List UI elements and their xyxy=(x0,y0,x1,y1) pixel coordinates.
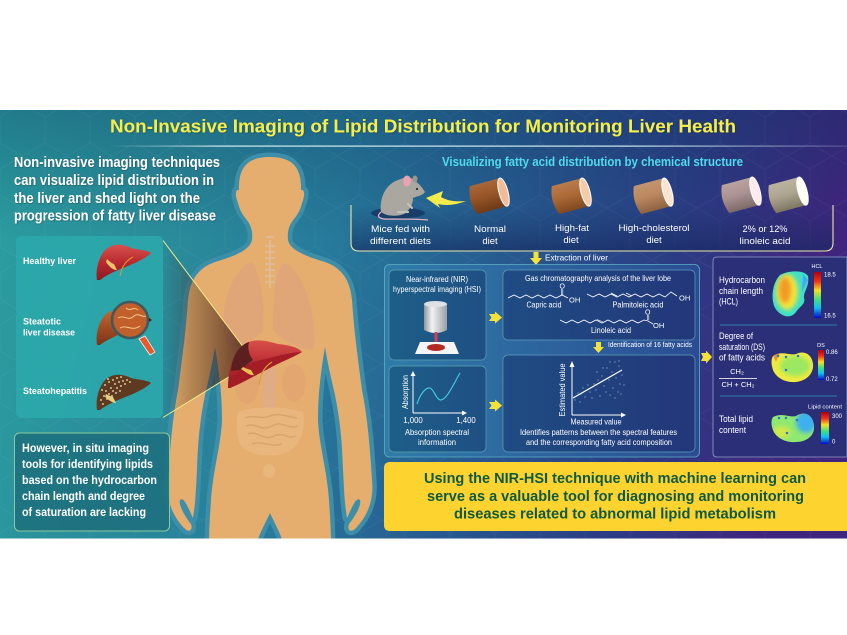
panel: absorption spectrum: Absorption spectral xyxy=(405,428,469,437)
diet labels: diet xyxy=(646,235,662,246)
icon: liver in body xyxy=(228,340,302,388)
arrow: NIR to gas chromatography xyxy=(489,312,502,324)
trachea xyxy=(265,237,275,288)
result: degree of saturation: saturation (DS) xyxy=(719,342,765,353)
arrow: extraction of liver xyxy=(530,252,542,265)
icon: high-cholesterol diet pellet xyxy=(631,177,676,215)
diet labels: High-cholesterol xyxy=(618,223,690,234)
absorption chart: 1,400 xyxy=(456,416,476,425)
intro text: can visualize lipid distribution in xyxy=(14,173,214,189)
diet labels: High-fat xyxy=(555,223,589,234)
callout: lacking tools: tools for identifying lipids xyxy=(22,457,153,471)
capric acid structure: OH xyxy=(569,296,580,304)
absorption chart: Absorption xyxy=(401,375,410,409)
background banner xyxy=(0,110,847,538)
heatmap: HCL xyxy=(772,271,808,316)
colour bar: DS xyxy=(817,343,838,383)
icon: healthy liver xyxy=(97,245,151,280)
absorption chart xyxy=(401,371,476,425)
absorption chart: 1,000 xyxy=(403,416,423,425)
human body figure xyxy=(168,157,372,545)
result: total lipid content: content xyxy=(719,425,746,436)
capric acid structure: Capric acid xyxy=(526,300,562,310)
diet labels xyxy=(370,223,790,247)
icon: normal diet pellet xyxy=(467,177,512,215)
result: hydrocarbon chain length: Hydrocarbon xyxy=(719,275,765,286)
conclusion callout xyxy=(384,462,847,531)
linoleic acid structure: O xyxy=(645,310,651,316)
result: hydrocarbon chain length: (HCL) xyxy=(719,296,738,308)
icon: 2% linoleic acid pellet xyxy=(719,176,764,214)
heatmap: lipid xyxy=(772,414,814,442)
panel: gas chromatography: Gas chromatography analysis of the liver lobe xyxy=(525,274,671,283)
formula xyxy=(719,367,757,389)
intro text: progression of fatty liver disease xyxy=(14,208,216,224)
lungs xyxy=(223,262,314,350)
formula: CH₂ xyxy=(730,367,744,376)
intro text: Non-invasive imaging techniques xyxy=(14,155,220,171)
capric acid structure: O xyxy=(560,284,566,290)
diet labels: diet xyxy=(482,236,498,247)
panel: analysis workflow xyxy=(384,264,700,457)
panel: machine learning patterns xyxy=(503,355,695,452)
arrow: workflow to results xyxy=(701,350,712,364)
extraction label: Extraction of liver xyxy=(545,252,608,262)
panel: NIR hyperspectral imaging: Near-infrared (NIR) xyxy=(406,275,468,284)
scatter plot xyxy=(558,361,626,426)
intro text xyxy=(14,155,220,224)
icon: 12% linoleic acid pellet xyxy=(766,176,811,214)
colour bar: lipid: Lipid content xyxy=(808,404,842,410)
steatotic liver disease label xyxy=(23,316,75,338)
palmitoleic acid structure: Palmitoleic acid xyxy=(612,300,664,310)
palmitoleic acid structure: OH xyxy=(679,294,690,302)
intestines xyxy=(237,408,304,455)
icon: imaging device xyxy=(415,301,459,354)
steatotic liver disease label: Steatotic xyxy=(23,316,61,326)
panel: gas chromatography xyxy=(503,270,695,340)
identification label: Identification of 16 fatty acids xyxy=(608,342,692,349)
colour bar: DS: DS xyxy=(817,343,825,349)
capric acid structure xyxy=(508,284,580,310)
panel: imaging results xyxy=(713,257,847,457)
heatmap: DS xyxy=(772,352,814,382)
icon: mouse xyxy=(371,176,428,220)
result: hydrocarbon chain length xyxy=(719,264,836,320)
diet labels: linoleic acid xyxy=(740,236,790,247)
conclusion callout: serve as a valuable tool for diagnosing and monitoring xyxy=(427,488,804,505)
result: total lipid content xyxy=(719,404,843,446)
colour bar: HCL xyxy=(811,264,836,320)
diet labels: Mice fed with xyxy=(371,224,430,235)
formula: CH + CH₂ xyxy=(721,380,755,389)
linoleic acid structure: Linoleic acid xyxy=(591,326,631,335)
colour bar: DS: 0.72 xyxy=(826,377,838,383)
colour bar: lipid: 0 xyxy=(832,440,836,446)
colour bar: DS: 0.86 xyxy=(826,350,838,356)
conclusion callout: diseases related to abnormal lipid metabolism xyxy=(454,506,776,522)
colour bar: lipid: 300 xyxy=(832,414,843,420)
result: hydrocarbon chain length: chain length xyxy=(719,286,763,297)
diet labels: 2% or 12% xyxy=(742,224,788,235)
colour bar: lipid xyxy=(808,404,843,446)
diet labels: different diets xyxy=(370,236,431,247)
panel: diets xyxy=(351,155,833,251)
panel: absorption spectrum: information xyxy=(418,438,456,447)
intro text: the liver and shed light on the xyxy=(14,191,200,207)
result: degree of saturation xyxy=(719,331,838,389)
panel: machine learning patterns: and the corresponding fatty acid composition xyxy=(526,438,672,447)
arrow: identification xyxy=(593,342,604,353)
kidneys xyxy=(253,368,276,408)
linoleic acid structure: OH xyxy=(653,321,664,330)
callout: lacking tools: based on the hydrocarbon xyxy=(22,473,157,487)
diet labels: diet xyxy=(563,235,579,246)
zoom cone from liver to panel xyxy=(163,240,253,418)
panel: absorption spectrum xyxy=(389,366,486,452)
palmitoleic acid structure xyxy=(587,292,690,310)
conclusion callout: Using the NIR-HSI technique with machine learning can xyxy=(424,470,806,487)
callout: lacking tools: chain length and degree xyxy=(22,489,145,503)
panel: NIR hyperspectral imaging: hyperspectral imaging (HSI) xyxy=(393,285,481,294)
arrow: diet to mouse xyxy=(426,191,466,208)
panel: machine learning patterns: Identifies patterns between the spectral features xyxy=(520,428,677,437)
callout: lacking tools xyxy=(14,433,170,531)
result: degree of saturation: of fatty acids xyxy=(719,352,765,364)
linoleic acid structure xyxy=(560,310,664,335)
steatohepatitis label: Steatohepatitis xyxy=(23,386,87,396)
scatter plot: Measured value xyxy=(570,418,622,426)
callout: lacking tools: of saturation are lacking xyxy=(22,505,146,519)
panel: NIR hyperspectral imaging xyxy=(389,270,486,360)
colour bar: HCL: 18.5 xyxy=(824,272,836,278)
result: degree of saturation: Degree of xyxy=(719,331,753,342)
title: Non-Invasive Imaging of Lipid Distribution for Monitoring Liver Health xyxy=(110,116,736,136)
icon: steatotic liver with magnifier xyxy=(97,302,155,355)
steatotic liver disease label: liver disease xyxy=(23,328,75,338)
icon: high-fat diet pellet xyxy=(549,177,594,215)
diet labels: Normal xyxy=(474,224,506,235)
bladder xyxy=(263,464,275,478)
colour bar: HCL: 16.5 xyxy=(824,314,836,320)
icon: cirrhotic liver xyxy=(97,375,151,410)
healthy liver label: Healthy liver xyxy=(23,256,76,266)
arrow: absorption to pattern identification xyxy=(489,400,502,412)
panel: liver stages xyxy=(16,236,163,418)
callout: lacking tools: However, in situ imaging xyxy=(22,441,149,455)
panel heading: Visualizing fatty acid distribution by chemical structure xyxy=(442,155,743,169)
colour bar: HCL: HCL xyxy=(811,264,823,270)
scatter plot: Estimated value xyxy=(558,364,567,416)
result: total lipid content: Total lipid xyxy=(719,414,753,425)
